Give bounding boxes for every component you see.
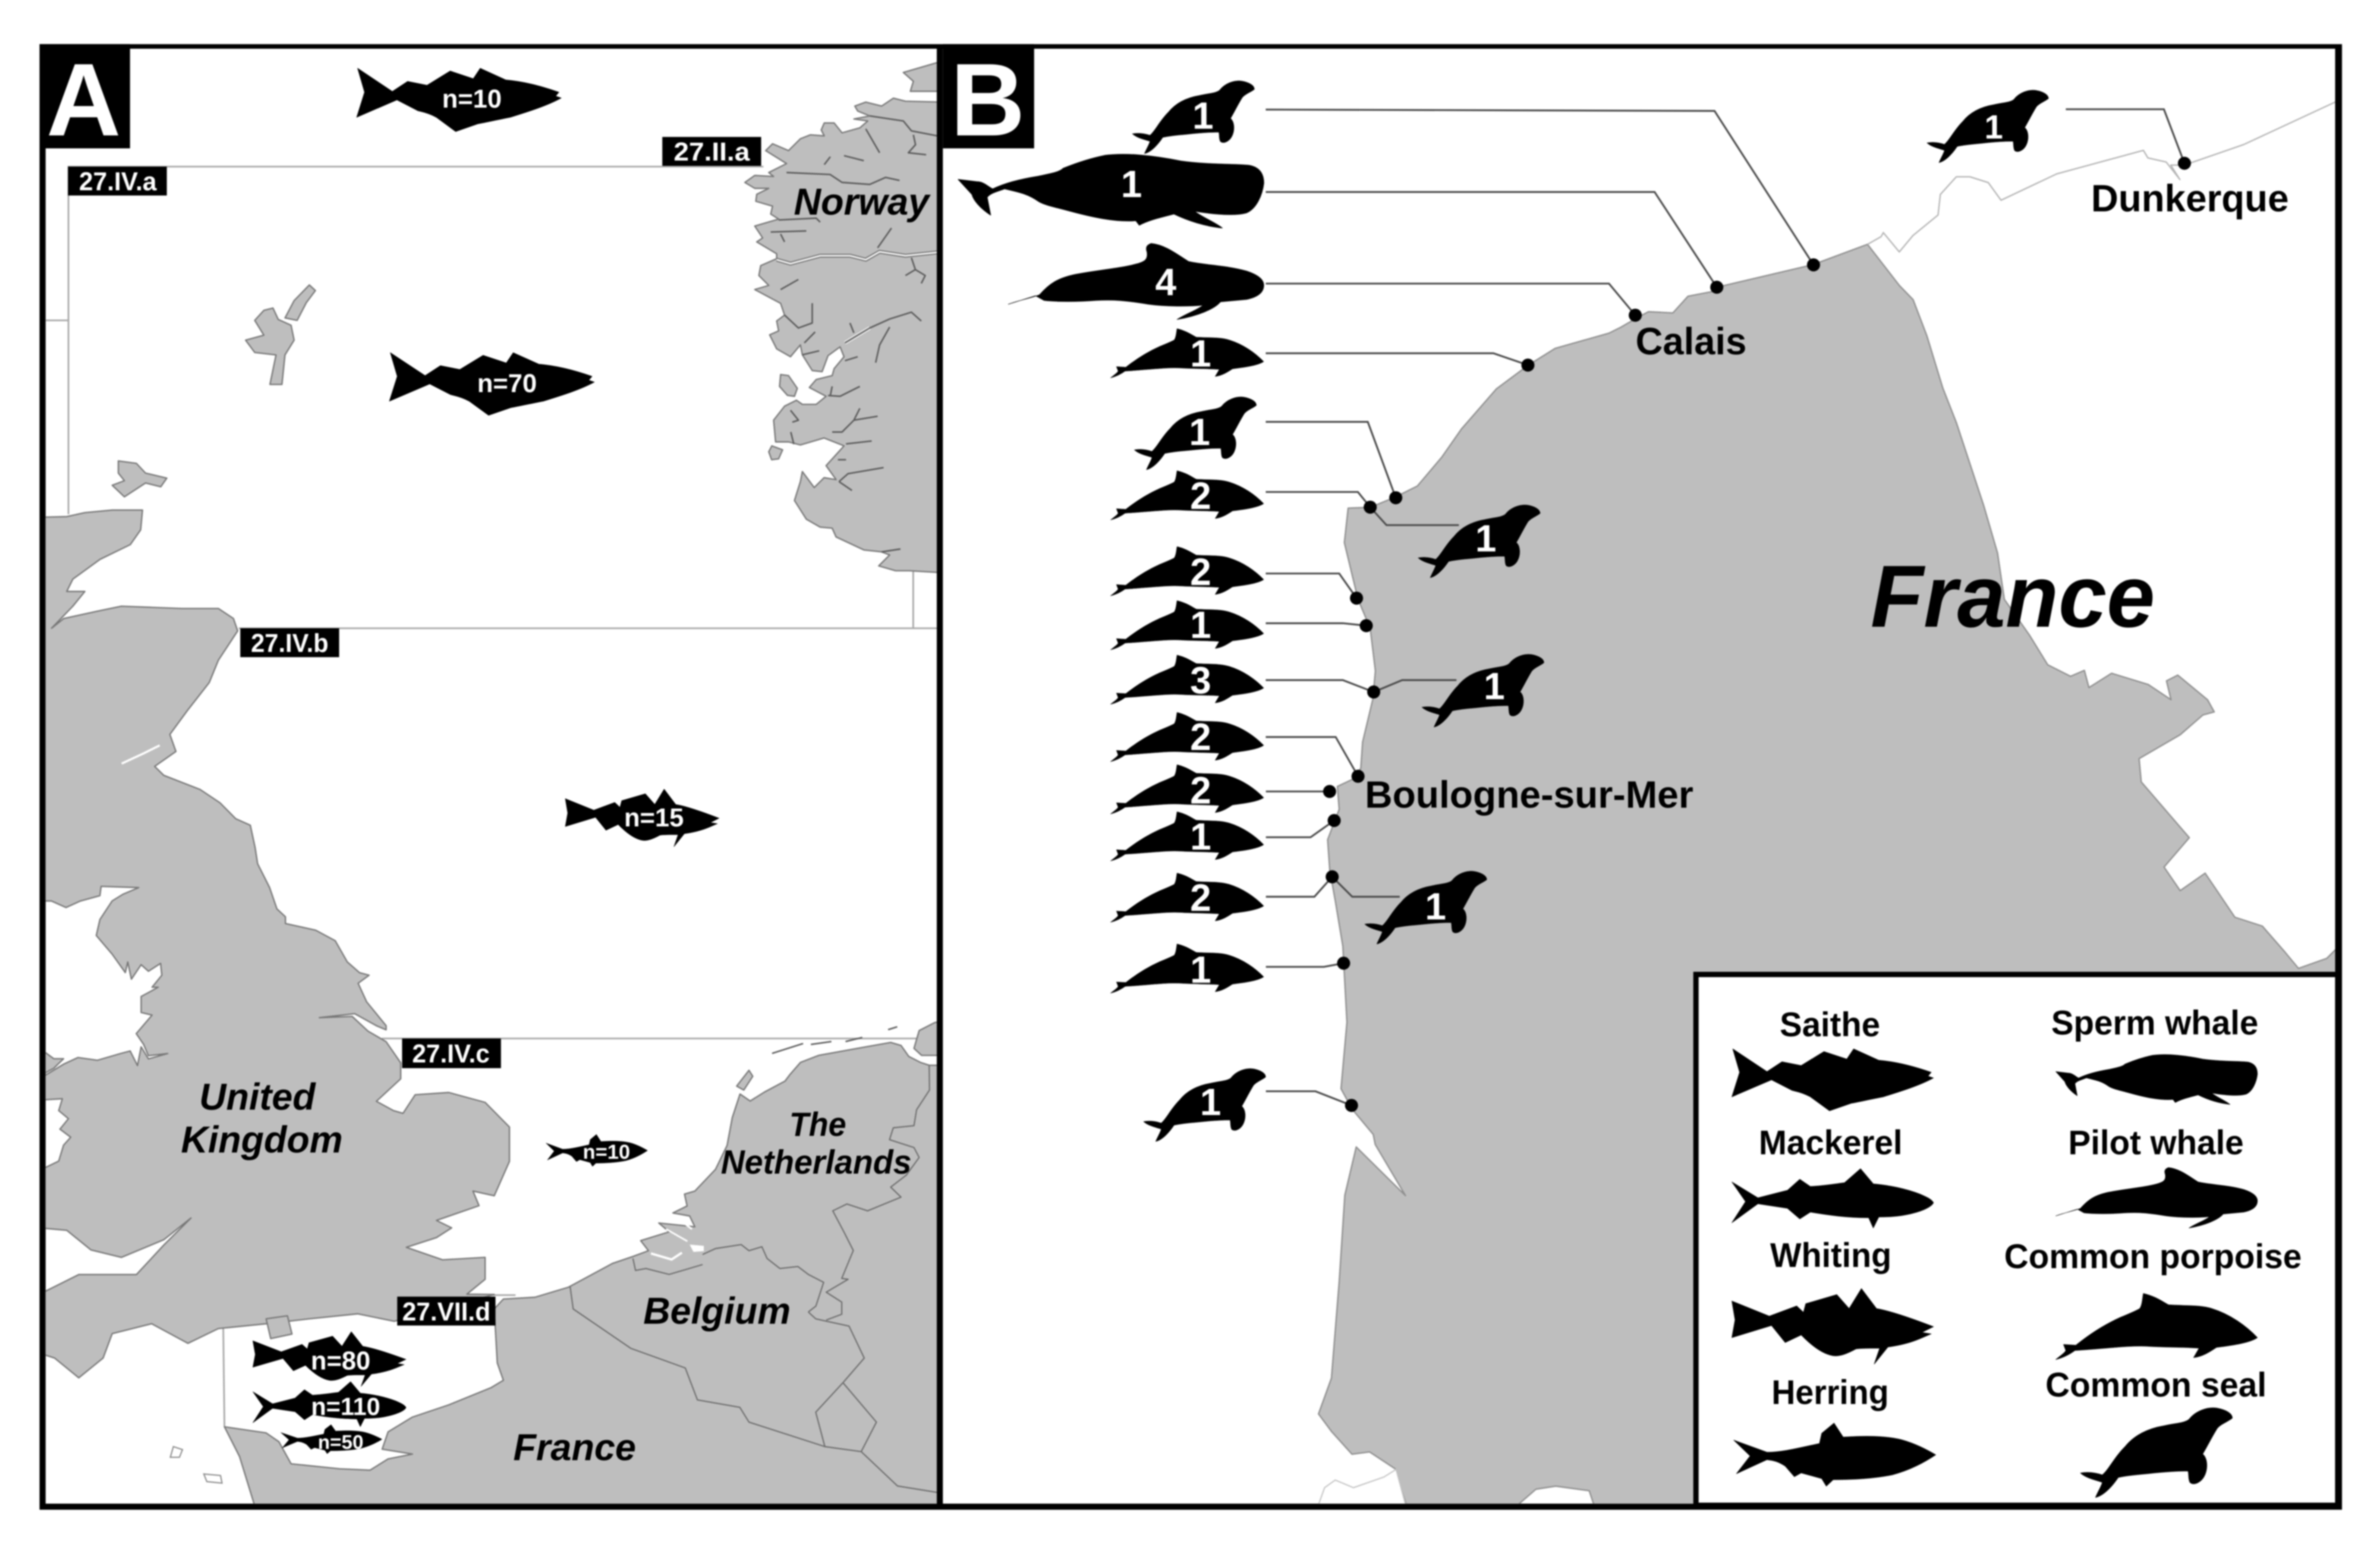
animal: porpoise count 3: [1110, 655, 1264, 705]
animal: seal count 1: [1422, 654, 1544, 727]
animal: porpoise count 2: 2: [1190, 715, 1211, 758]
legend item: common porpoise: [2004, 1238, 2302, 1360]
fish: whiting n=15: n=15: [624, 804, 684, 832]
connector: pilot whale to Calais: [1265, 284, 1642, 322]
Great Britain: [40, 510, 509, 1378]
connector: seal to stranding site: [1265, 109, 1820, 272]
legend item: saithe: Saithe: [1780, 1006, 1880, 1044]
area tag 27.IV.b: 27.IV.b: [251, 629, 329, 658]
country label France: France: [1871, 548, 2155, 646]
animal: porpoise count 1: 1: [1190, 948, 1211, 991]
legend item: herring: [1734, 1374, 1936, 1486]
fish: saithe n=10: n=10: [442, 85, 502, 114]
connector: porpoise to site: [1265, 574, 1363, 605]
legend item: whiting: [1732, 1237, 1934, 1364]
connector: porpoise and seal to shared site: [1266, 870, 1400, 897]
country label The Netherlands: The: [789, 1105, 846, 1143]
city label Boulogne-sur-Mer: Boulogne-sur-Mer: [1365, 773, 1693, 816]
animal: porpoise count 3: 3: [1190, 659, 1211, 702]
animal: sperm whale count 1: 1: [1121, 162, 1142, 205]
animal: porpoise count 2: 2: [1190, 876, 1211, 919]
animal: seal count 1: 1: [1484, 665, 1505, 707]
fish: mackerel n=110: [253, 1382, 406, 1427]
legend item: herring: Herring: [1771, 1374, 1889, 1412]
fish: saithe n=70: [389, 353, 594, 416]
fish: saithe n=70: n=70: [477, 369, 537, 398]
animal: sperm whale count 1: [958, 154, 1264, 228]
connector: porpoise to site: [1266, 814, 1341, 837]
fish: whiting n=15: [565, 789, 719, 847]
animal: porpoise count 1: 1: [1190, 332, 1211, 375]
fish: whiting n=80: [253, 1332, 406, 1386]
Norway: [903, 61, 943, 92]
animal: porpoise count 1: [1110, 812, 1264, 861]
animal: seal count 1 near Dunkerque: 1: [1985, 108, 2003, 146]
country label The Netherlands: Netherlands: [721, 1143, 912, 1181]
panel B: stranding map of northern France: [943, 42, 2342, 1509]
animal: porpoise count 2: 2: [1190, 551, 1211, 593]
legend item: common seal: Common seal: [2045, 1366, 2266, 1404]
animal: porpoise count 1: [1110, 600, 1264, 650]
country label The Netherlands: [721, 1105, 912, 1181]
animal: seal count 1: 1: [1192, 94, 1214, 137]
map A: land masses and ICES grid: [40, 61, 943, 1506]
connector: porpoise to site: [1266, 785, 1336, 798]
fish: saithe n=10: [357, 68, 561, 131]
connector: porpoise to Boulogne: [1265, 737, 1365, 783]
connector: seal to Dunkerque: [2066, 109, 2191, 170]
area tag 27.VII.d: 27.VII.d: [402, 1298, 490, 1326]
city label Dunkerque: Dunkerque: [2091, 177, 2288, 220]
connector: porpoise and seal to shared site: [1265, 492, 1459, 525]
animal: porpoise count 2: 2: [1190, 474, 1211, 517]
legend item: sperm whale: Sperm whale: [2051, 1004, 2258, 1042]
animal: seal count 1: 1: [1425, 885, 1446, 927]
animal: seal count 1: 1: [1189, 410, 1210, 453]
panel letter A: A: [46, 42, 121, 158]
animal: seal count 1: [1132, 81, 1254, 154]
fish: herring n=50: n=50: [318, 1432, 363, 1454]
country label Norway: Norway: [794, 181, 931, 223]
animal: porpoise count 2: [1110, 546, 1264, 596]
animal: pilot whale count 4: [1008, 243, 1264, 319]
country label United Kingdom: United: [199, 1077, 316, 1118]
animal: porpoise count 1: 1: [1190, 815, 1211, 858]
animal: porpoise count 1: [1110, 329, 1264, 378]
area tag 27.II.a: 27.II.a: [673, 138, 750, 166]
connector: porpoise and seal to shared site: [1265, 680, 1456, 699]
legend item: pilot whale: [2056, 1124, 2258, 1228]
legend item: common seal: [2045, 1366, 2266, 1498]
animal: porpoise count 2: [1110, 765, 1264, 814]
animal: pilot whale count 4: 4: [1156, 260, 1177, 303]
legend item: mackerel: [1732, 1124, 1934, 1228]
animal: seal count 1: 1: [1475, 517, 1496, 560]
fish: whiting n=80: n=80: [311, 1347, 370, 1376]
connector: sperm whale to stranding site: [1265, 192, 1723, 294]
fish: herring n=50: [281, 1424, 382, 1454]
animal: seal count 1: [1418, 505, 1540, 578]
animal: porpoise count 2: [1110, 471, 1264, 520]
country label United Kingdom: Kingdom: [181, 1120, 343, 1161]
animal: porpoise count 2: [1110, 873, 1264, 922]
panel A: North Sea fish sampling map: [40, 42, 943, 1506]
legend item: mackerel: Mackerel: [1759, 1124, 1903, 1162]
animal: seal count 1: [1365, 871, 1487, 944]
map B: French coast and borders: [1317, 99, 2342, 1509]
animal: porpoise count 2: [1110, 712, 1264, 762]
legend item: sperm whale: [2051, 1004, 2258, 1105]
animal: porpoise count 1: [1110, 944, 1264, 993]
legend item: saithe: [1732, 1006, 1934, 1111]
country label Belgium: Belgium: [643, 1290, 791, 1332]
area tag 27.IV.a: 27.IV.a: [79, 168, 157, 196]
connector: porpoise to site: [1266, 957, 1350, 970]
legend inset: [1696, 974, 2338, 1505]
country label France: France: [513, 1427, 636, 1468]
fish: herring n=10: [546, 1134, 648, 1166]
continental coast: France, Belgium, Netherlands, Germany: [225, 1042, 943, 1506]
connector: seal to site: [1266, 1092, 1358, 1112]
city label Calais: Calais: [1636, 320, 1746, 363]
animal: seal count 1 near Dunkerque: [1927, 90, 2048, 163]
legend item: common porpoise: Common porpoise: [2004, 1238, 2302, 1276]
animal: porpoise count 1: 1: [1190, 603, 1211, 646]
legend item: whiting: Whiting: [1770, 1237, 1891, 1275]
country label United Kingdom: [181, 1077, 343, 1161]
animal: seal count 1: [1134, 397, 1257, 470]
panel letter B: B: [950, 42, 1025, 158]
fish: mackerel n=110: n=110: [311, 1392, 380, 1420]
area tag 27.IV.c: 27.IV.c: [412, 1040, 490, 1068]
connector: seal to site: [1265, 422, 1402, 504]
connector: porpoise to site: [1265, 353, 1534, 372]
connector: porpoise to site: [1265, 619, 1373, 632]
animal: seal count 1: 1: [1200, 1080, 1221, 1123]
fish: herring n=10: n=10: [583, 1141, 630, 1163]
legend item: pilot whale: Pilot whale: [2069, 1124, 2244, 1162]
animal: porpoise count 2: 2: [1190, 769, 1211, 812]
animal: seal count 1: [1144, 1068, 1265, 1142]
